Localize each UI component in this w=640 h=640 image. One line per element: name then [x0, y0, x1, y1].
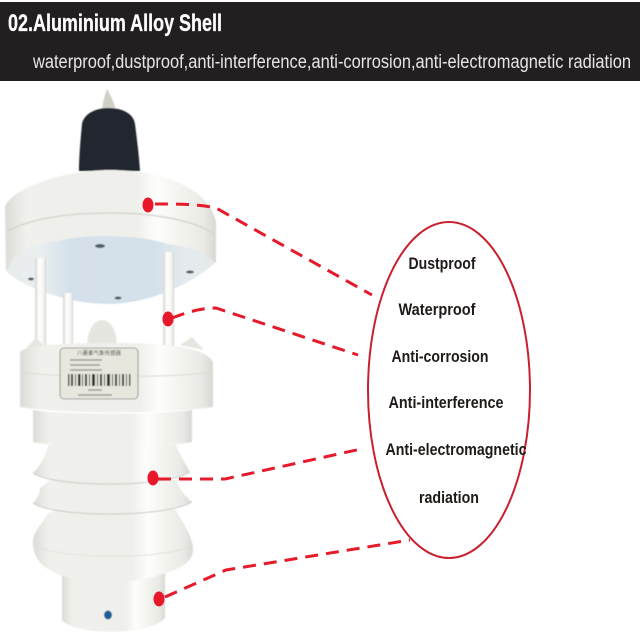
header banner [0, 2, 640, 81]
callout features list [386, 255, 526, 507]
bottom cylinder [62, 570, 165, 632]
neck [33, 410, 192, 446]
product label [60, 348, 138, 399]
shield 3 [33, 505, 193, 582]
callout features list: Waterproof [398, 301, 476, 319]
icon: black foam windscreen [79, 108, 140, 171]
housing side tabs [26, 337, 204, 350]
rear post [63, 293, 73, 348]
dashed leader lines [155, 204, 410, 597]
icon: blue vent dot [104, 610, 112, 620]
callout features list: Anti-corrosion [392, 348, 488, 366]
sensor device photo [5, 89, 216, 632]
callout features list: Anti-interference [388, 394, 504, 412]
icon: spike [102, 89, 116, 110]
title: 02.Aluminium Alloy Shell [8, 10, 222, 37]
callout features list: radiation [419, 489, 479, 507]
callout features list: Anti-electromagnetic [386, 441, 526, 459]
red dot markers [142, 198, 174, 606]
right post [163, 252, 174, 347]
left post [35, 258, 46, 348]
callout ellipse [368, 222, 530, 558]
top cap [5, 170, 216, 272]
screw holes [28, 244, 194, 300]
shield 2 [33, 480, 192, 514]
middle housing [20, 343, 213, 412]
barcode [68, 374, 130, 386]
shield 1 [33, 443, 190, 484]
underside of top cap [7, 235, 215, 304]
center knob [87, 320, 117, 348]
callout features list: Dustproof [408, 255, 476, 273]
label heading: 八要素气象传感器 [77, 349, 121, 357]
